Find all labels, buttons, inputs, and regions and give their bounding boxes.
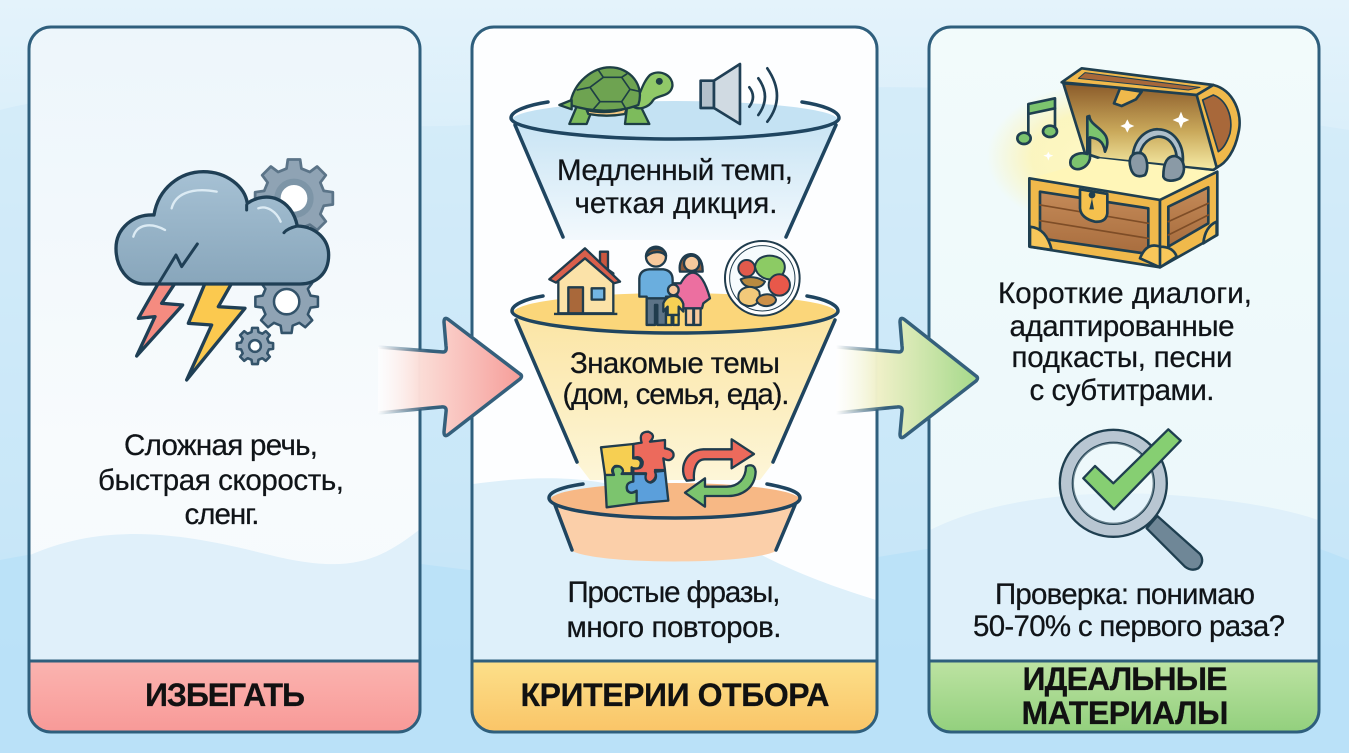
icon: music notes <box>1017 98 1107 169</box>
text: familiar topics: Знакомые темы <box>570 347 780 380</box>
text: avoid: Сложная речь, <box>124 429 318 462</box>
text: simple phrases <box>566 576 782 644</box>
arrow: criteria to ideal materials <box>836 318 978 440</box>
icon: magnifier with check <box>1066 429 1202 570</box>
icon: family <box>639 247 710 325</box>
footer label: criteria: КРИТЕРИИ ОТБОРА <box>520 677 830 713</box>
text: ideal materials list: с субтитрами. <box>1030 374 1214 407</box>
icon: food plate <box>725 241 800 316</box>
text: ideal materials list: подкасты, песни <box>1012 341 1232 374</box>
text: ideal materials list: адаптированные <box>1010 310 1234 343</box>
icon: speaker <box>701 64 777 124</box>
text: avoid <box>98 429 344 531</box>
footer label: ideal materials <box>1022 661 1228 731</box>
text: familiar topics: (дом, семья, еда). <box>562 378 790 411</box>
footer label: ideal materials: ИДЕАЛЬНЫЕ <box>1022 661 1228 697</box>
text: slow pace: четкая дикция. <box>574 187 778 220</box>
funnel: middle tier <box>512 293 838 480</box>
icon: storm cloud and gears <box>116 159 333 380</box>
text: simple phrases: много повторов. <box>566 611 782 644</box>
panel: ideal materials <box>929 27 1319 732</box>
funnel: bottom tier <box>549 483 800 562</box>
icon: house <box>549 248 620 314</box>
footer: avoid <box>30 661 419 731</box>
text: slow pace <box>557 154 793 220</box>
icon: puzzle <box>601 432 674 507</box>
funnel: top tier <box>511 101 839 240</box>
footer label: avoid: ИЗБЕГАТЬ <box>145 677 305 713</box>
arrow: avoid to criteria <box>378 318 522 438</box>
text: simple phrases: Простые фразы, <box>568 576 780 609</box>
icon: repeat arrows <box>683 439 756 507</box>
icon: treasure chest <box>987 68 1240 267</box>
footer: criteria <box>473 661 876 731</box>
footer: ideal materials <box>930 661 1318 731</box>
text: comprehension check: 50-70% с первого раза? <box>973 610 1285 643</box>
text: comprehension check: Проверка: понимаю <box>995 578 1255 611</box>
panel: criteria <box>472 27 877 732</box>
text: ideal materials list: Короткие диалоги, <box>998 277 1252 310</box>
text: ideal materials list <box>998 277 1252 407</box>
icon: turtle <box>559 67 672 124</box>
text: avoid: быстрая скорость, <box>98 464 344 497</box>
text: avoid: сленг. <box>184 498 260 531</box>
footer label: ideal materials: МАТЕРИАЛЫ <box>1022 695 1228 731</box>
text: comprehension check <box>973 578 1285 643</box>
text: familiar topics <box>562 347 790 411</box>
icon: headphones <box>1130 129 1184 181</box>
panel: avoid <box>29 27 420 732</box>
text: slow pace: Медленный темп, <box>557 154 793 187</box>
